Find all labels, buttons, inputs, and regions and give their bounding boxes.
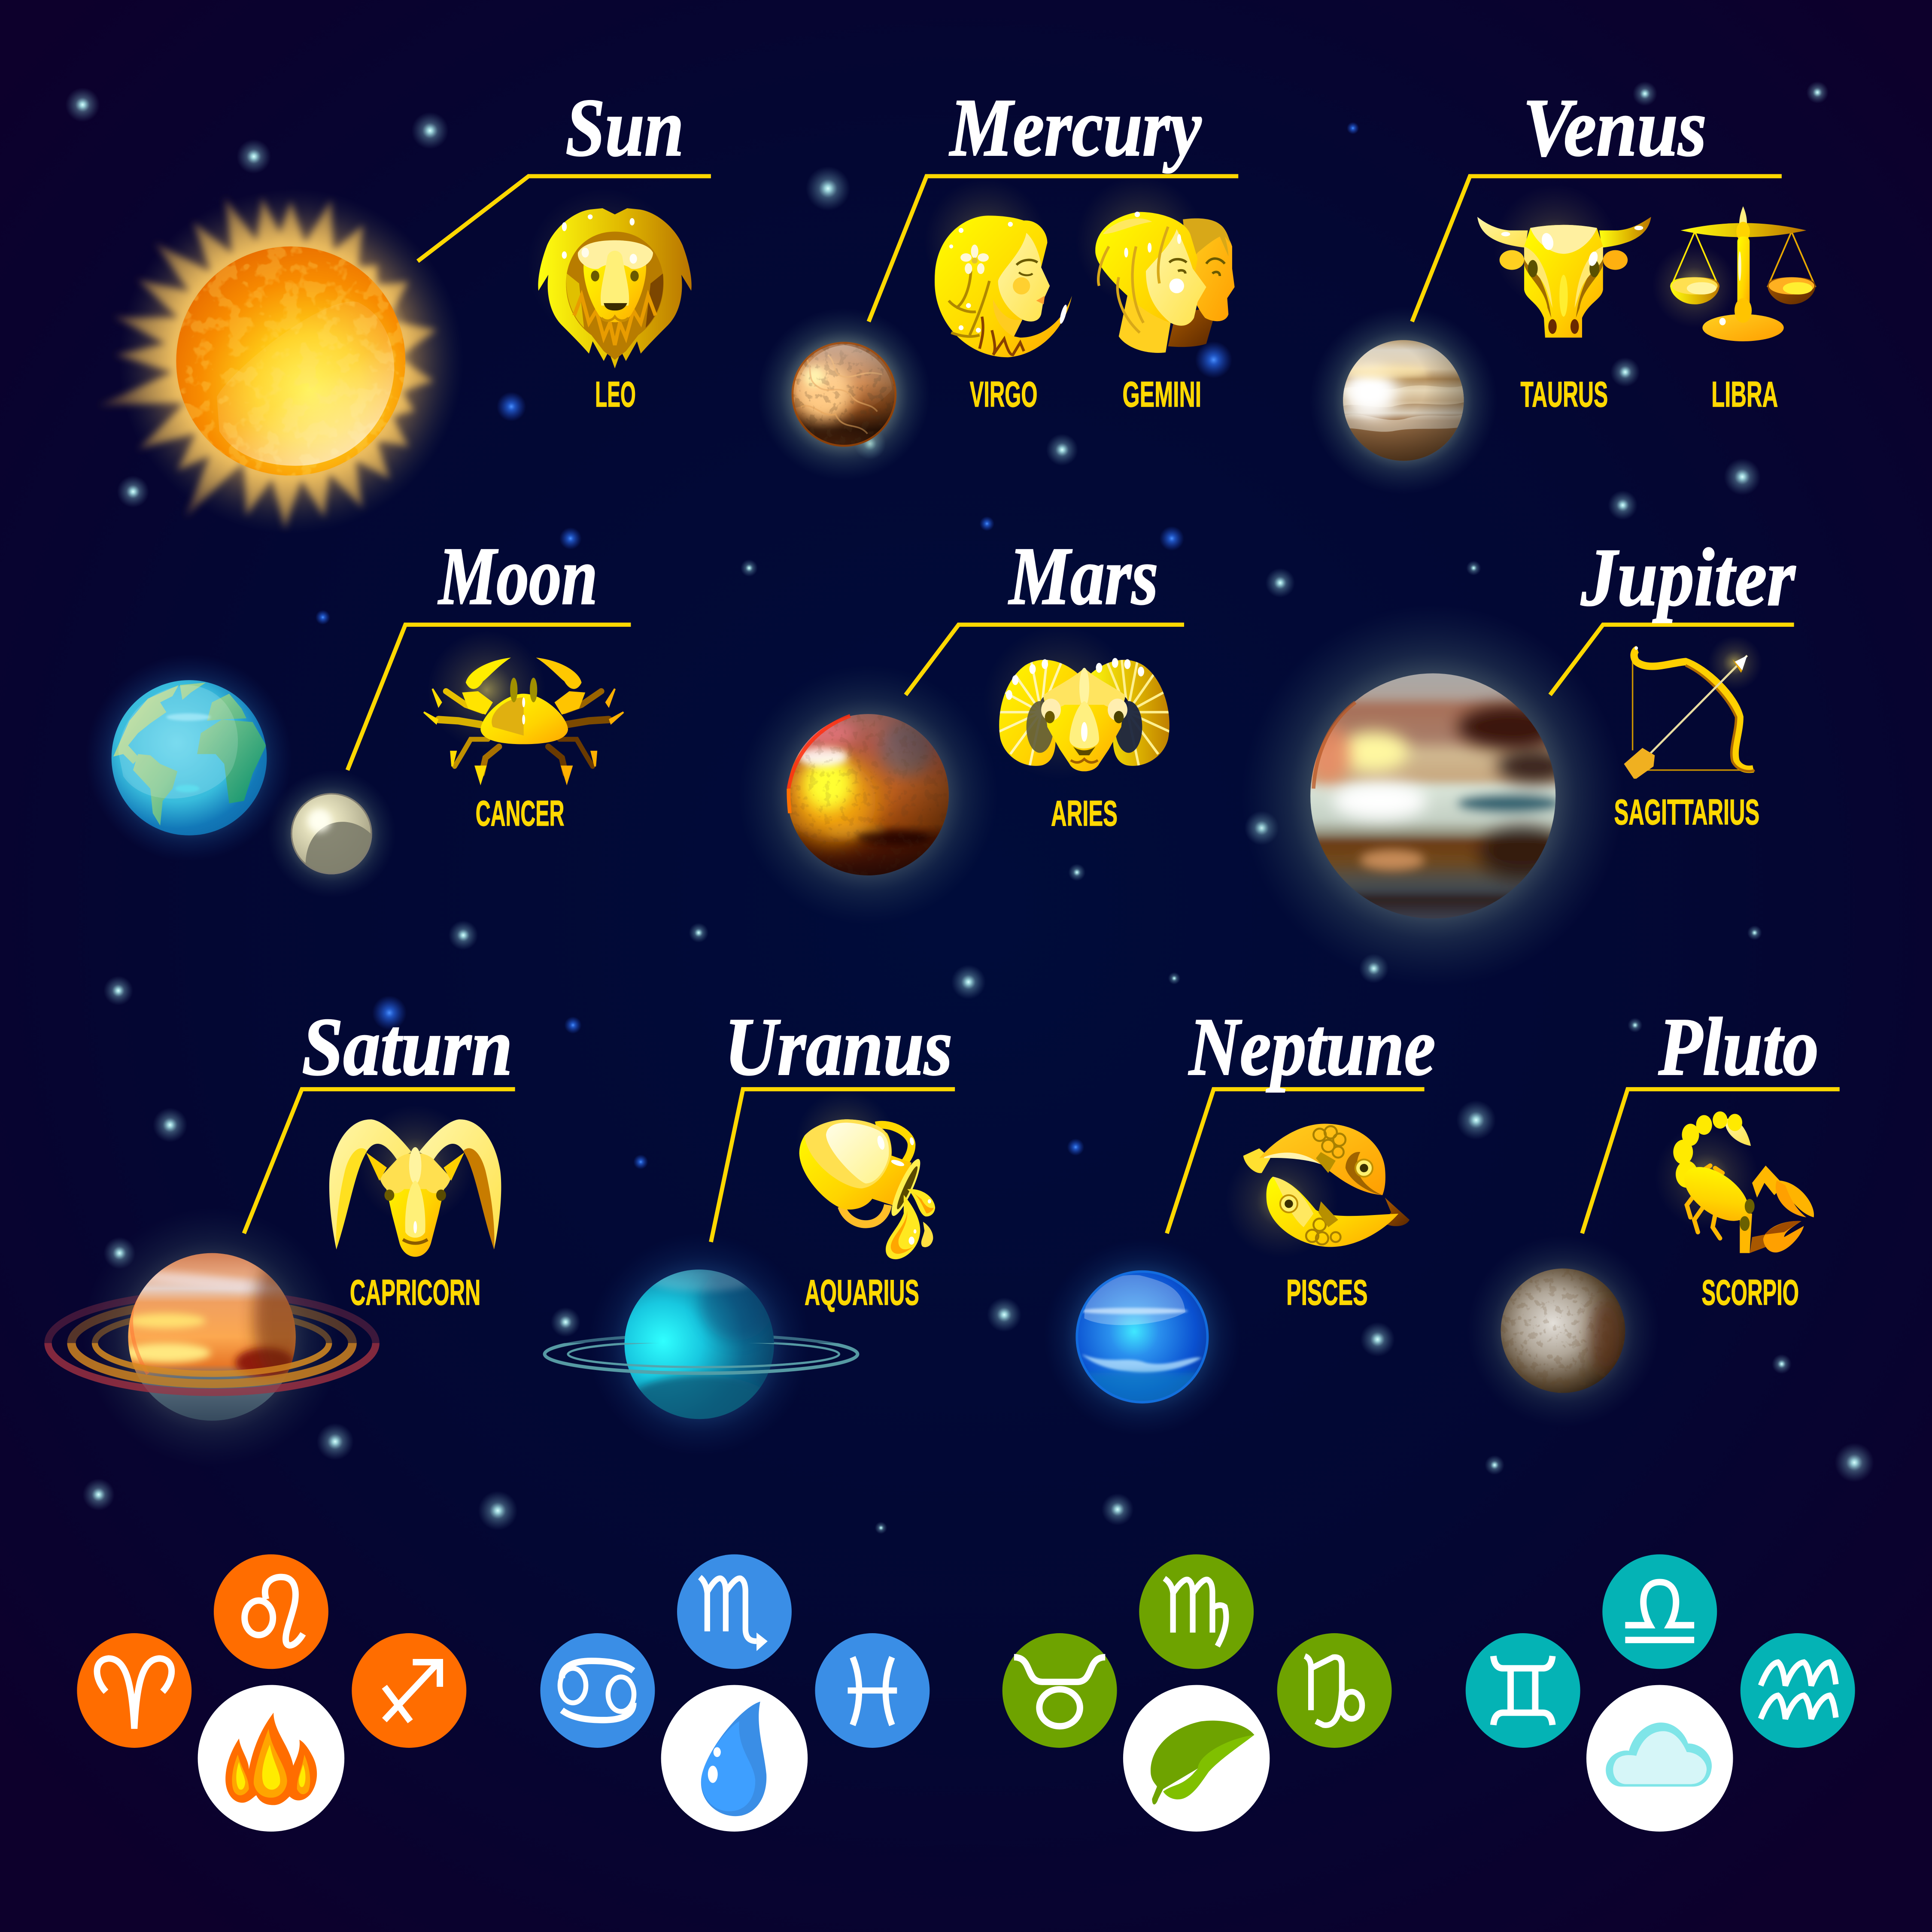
title: Mars — [1008, 530, 1158, 622]
connector line — [1412, 176, 1782, 322]
planet: Moon — [267, 770, 395, 898]
panel: Sun — [94, 82, 711, 534]
label: PISCES — [1286, 1273, 1368, 1312]
panel: Neptune — [1044, 1001, 1435, 1435]
panel: Uranus — [544, 1001, 955, 1455]
connector line — [869, 176, 1238, 322]
title: Saturn — [302, 1001, 513, 1093]
label: LEO — [595, 374, 636, 414]
label: VIRGO — [970, 374, 1037, 414]
planet: Jupiter — [1242, 605, 1624, 987]
planet: Neptune — [1044, 1238, 1241, 1435]
planet: Earth — [85, 654, 293, 861]
panel: air signs — [1466, 1554, 1855, 1832]
icon: crab — [424, 631, 623, 782]
title: Jupiter — [1580, 532, 1796, 623]
panel: Moon — [85, 530, 631, 898]
planet: Venus — [1310, 307, 1497, 494]
label: TAURUS — [1520, 374, 1608, 414]
panel: Venus — [1310, 82, 1816, 494]
connector line — [1582, 1089, 1840, 1233]
planet: Mercury — [758, 308, 930, 480]
element: leaf — [1123, 1685, 1270, 1832]
panel: Saturn — [48, 1001, 515, 1466]
badge: Sagittarius symbol — [352, 1633, 466, 1748]
title: Sun — [565, 82, 684, 173]
title: Mercury — [949, 82, 1202, 173]
icon: lion — [527, 188, 692, 368]
badge: Aquarius symbol — [1741, 1633, 1855, 1748]
icon: scorpion — [1655, 1112, 1814, 1253]
icon: Virgo maiden — [924, 179, 1072, 357]
title: Uranus — [725, 1001, 952, 1093]
panel: fire signs — [77, 1554, 466, 1832]
label: GEMINI — [1122, 374, 1201, 414]
icon: scales — [1653, 206, 1816, 341]
title: Pluto — [1658, 1001, 1819, 1093]
planet: Mars — [739, 665, 997, 924]
icon: goat — [329, 1105, 501, 1257]
badge: Taurus symbol — [1002, 1633, 1117, 1748]
connector line — [347, 625, 631, 770]
badge: Virgo symbol — [1139, 1554, 1254, 1669]
panel: Mars — [739, 530, 1184, 924]
panel: Pluto — [1467, 1001, 1840, 1427]
label: SAGITTARIUS — [1614, 792, 1759, 832]
connector line — [905, 625, 1184, 695]
star field — [65, 81, 1874, 1534]
element: fire — [198, 1685, 344, 1832]
element: cloud — [1586, 1685, 1733, 1832]
title: Moon — [437, 530, 598, 622]
badge: Capricorn symbol — [1277, 1633, 1392, 1748]
badge: Pisces symbol — [815, 1633, 930, 1748]
panel: water signs — [540, 1554, 930, 1832]
title: Neptune — [1188, 1001, 1435, 1093]
badge: Leo symbol — [214, 1554, 328, 1669]
planet: Sun with rays — [94, 188, 463, 534]
badge: Scorpio symbol — [677, 1554, 792, 1669]
connector line — [418, 176, 711, 261]
label: ARIES — [1051, 793, 1118, 833]
planet: Saturn with rings — [48, 1207, 376, 1466]
badge: Aries symbol — [77, 1633, 191, 1748]
label: CAPRICORN — [350, 1273, 480, 1312]
icon: water jug — [796, 1091, 935, 1259]
label: SCORPIO — [1701, 1273, 1799, 1312]
planet: Uranus with rings — [544, 1233, 857, 1455]
icon: bull — [1477, 185, 1651, 337]
connector line — [711, 1089, 955, 1242]
label: LIBRA — [1711, 374, 1778, 414]
element: water drop — [661, 1685, 808, 1832]
connector line — [244, 1089, 515, 1233]
connector line — [1167, 1089, 1425, 1233]
connector line — [1550, 625, 1794, 695]
title: Venus — [1523, 82, 1707, 173]
planet: Pluto — [1467, 1235, 1659, 1427]
badge: Cancer symbol — [540, 1633, 655, 1748]
panel: earth signs — [1002, 1554, 1392, 1832]
icon: fish — [1225, 1124, 1410, 1258]
badge: Libra symbol — [1602, 1554, 1717, 1669]
icon: ram — [983, 626, 1177, 779]
label: AQUARIUS — [805, 1273, 919, 1312]
badge: Gemini symbol — [1466, 1633, 1580, 1748]
panel: Jupiter — [1242, 532, 1796, 987]
icon: Gemini twins — [1075, 176, 1235, 353]
label: CANCER — [476, 793, 564, 833]
panel: Mercury — [758, 82, 1238, 480]
icon: bow and arrow — [1624, 636, 1762, 779]
